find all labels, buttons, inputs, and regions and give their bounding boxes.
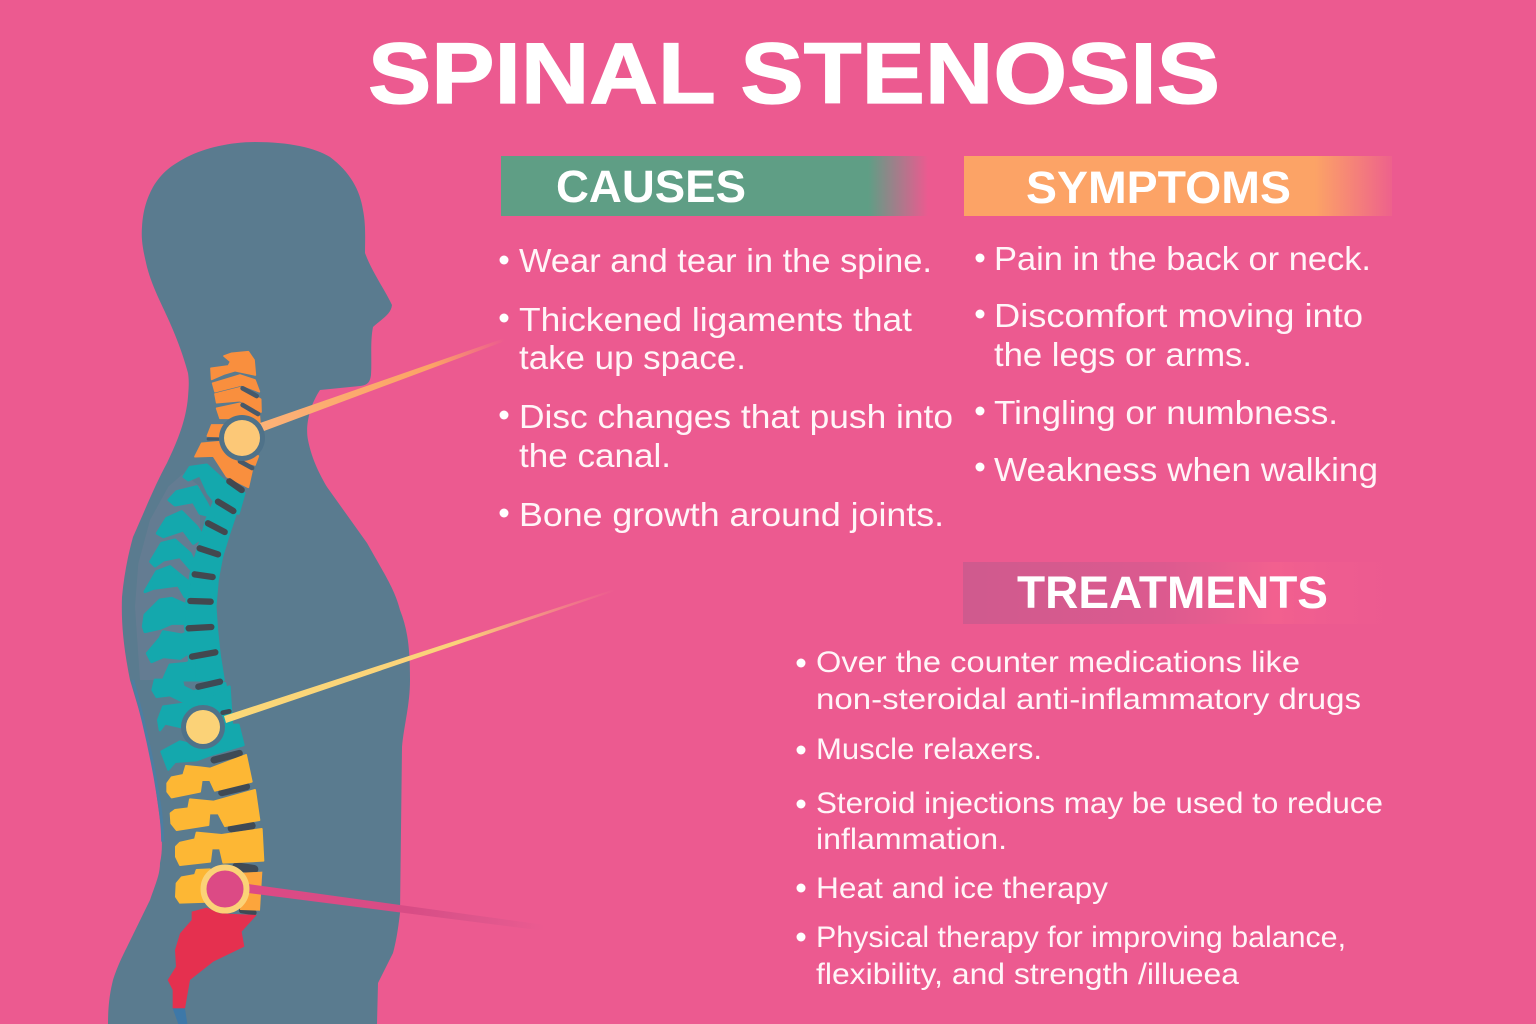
list: treatments: non-steroidal anti-inflammatory drugs xyxy=(816,683,1361,716)
list: causes: the canal. xyxy=(519,437,671,474)
list: causes: Disc changes that push into xyxy=(519,398,953,435)
lower thoracic vertebrae xyxy=(153,680,243,769)
marker: lower spine xyxy=(204,868,246,910)
thoracic vertebrae xyxy=(143,465,244,680)
list: causes: Thickened ligaments that xyxy=(519,301,912,338)
heading: treatments xyxy=(963,562,1408,624)
sacrum xyxy=(168,908,257,1008)
list: treatments: Steroid injections may be used to reduce xyxy=(816,787,1383,820)
marker: upper spine xyxy=(219,415,265,461)
list: treatments: Physical therapy for improving balance, xyxy=(816,921,1346,954)
list: treatments: Over the counter medications like xyxy=(816,646,1300,679)
lumbar vertebrae xyxy=(167,755,263,903)
lowest vertebra right side xyxy=(240,872,262,911)
list: causes: Wear and tear in the spine. xyxy=(519,242,932,279)
marker: mid spine xyxy=(181,705,225,749)
human body silhouette xyxy=(108,142,410,1024)
list: treatments: inflammation. xyxy=(816,823,1007,856)
connector line: symptoms xyxy=(224,589,615,723)
list: causes: take up space. xyxy=(519,339,746,376)
spine soft tissue band xyxy=(135,473,200,680)
list: treatments: Heat and ice therapy xyxy=(816,872,1108,905)
list: symptoms: Pain in the back or neck. xyxy=(994,240,1371,277)
lumbar discs xyxy=(198,682,254,913)
list: treatments xyxy=(796,646,1383,991)
cervical discs xyxy=(208,388,258,468)
list: causes: Bone growth around joints. xyxy=(519,496,944,533)
left edge shading xyxy=(133,680,163,842)
list: causes xyxy=(500,242,953,533)
list: symptoms: Discomfort moving into xyxy=(994,297,1363,334)
heading: symptoms xyxy=(964,156,1392,216)
heading: causes: CAUSES xyxy=(556,161,746,212)
connector line: causes xyxy=(260,338,505,431)
list: treatments: flexibility, and strength /illueea xyxy=(816,958,1239,991)
spine: cervical and thoracic xyxy=(135,352,261,680)
coccyx xyxy=(173,1008,187,1024)
spine: lumbar and sacrum xyxy=(133,680,263,1024)
list: symptoms: Weakness when walking xyxy=(994,451,1378,488)
heading: causes xyxy=(501,156,928,216)
cervical vertebrae xyxy=(195,352,261,487)
list: symptoms: Tingling or numbness. xyxy=(994,394,1338,431)
thoracic discs xyxy=(189,481,242,657)
title: SPINAL STENOSIS xyxy=(368,26,1220,122)
list: symptoms xyxy=(976,240,1378,488)
list: treatments: Muscle relaxers. xyxy=(816,733,1042,766)
connector line: treatments xyxy=(248,884,545,931)
list: symptoms: the legs or arms. xyxy=(994,336,1252,373)
heading: treatments: TREATMENTS xyxy=(1017,567,1328,618)
heading: symptoms: SYMPTOMS xyxy=(1026,162,1291,213)
